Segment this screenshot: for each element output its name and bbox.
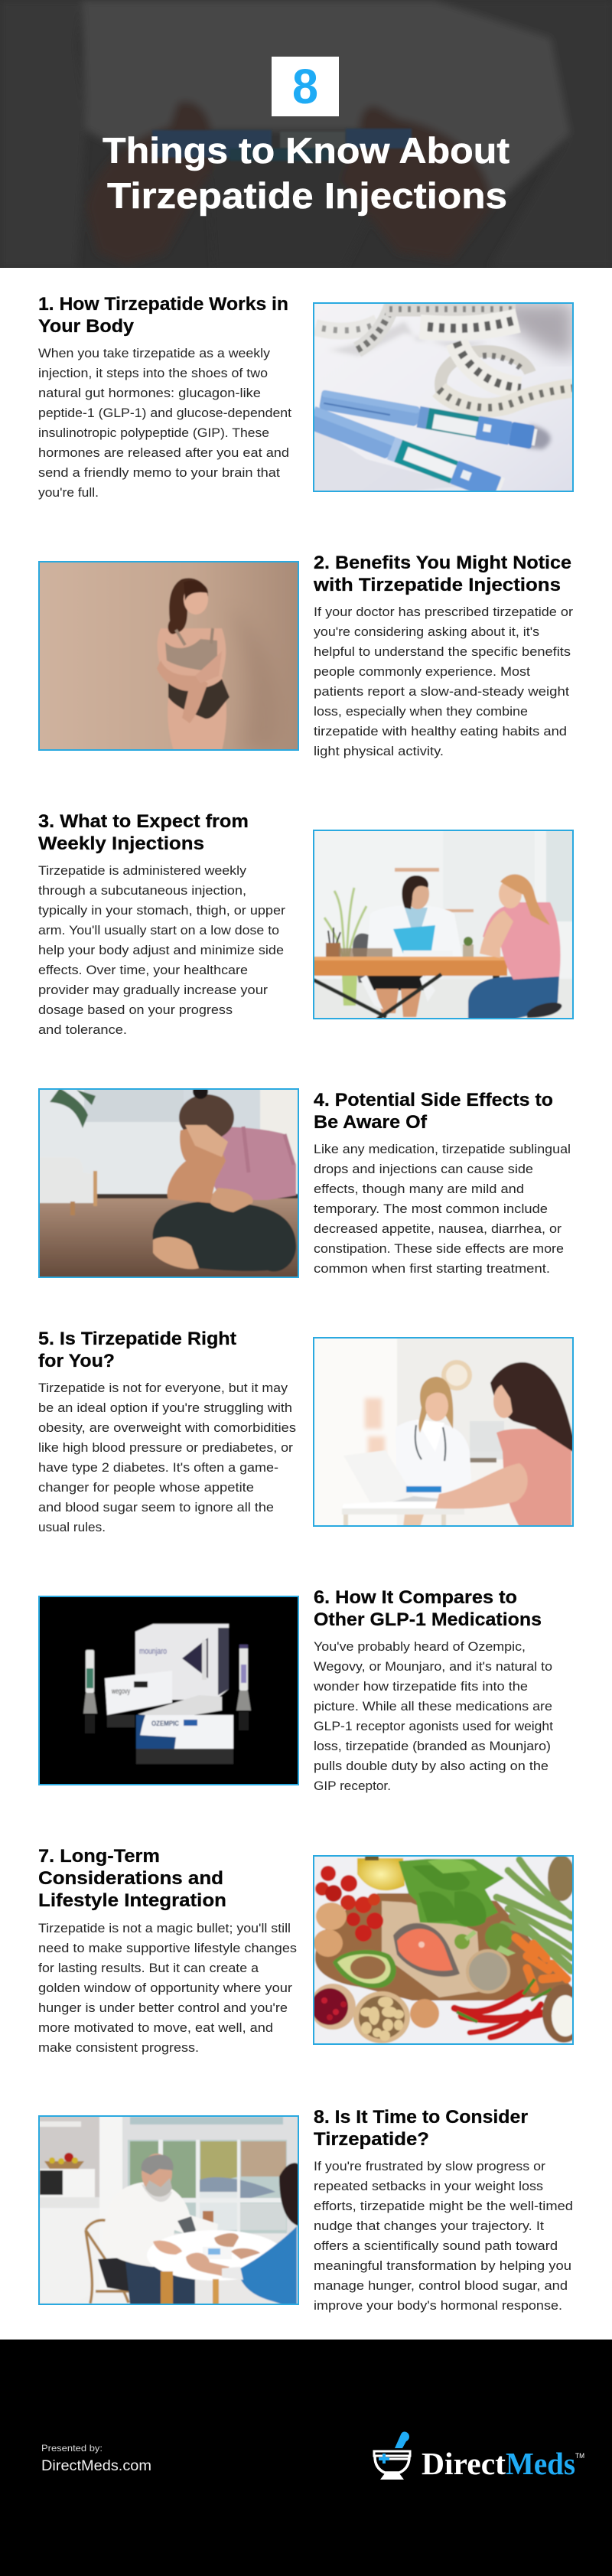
heading 5 — [38, 1329, 236, 1371]
heading 5: for You? — [38, 1351, 115, 1371]
text block 3: dosage based on your progress — [38, 1003, 233, 1017]
heading 7: 7. Long-Term — [38, 1846, 160, 1867]
text block 2: If your doctor has prescribed tirzepatide or — [314, 605, 574, 619]
heading 3 — [38, 811, 249, 854]
text block 7: Tirzepatide is not a magic bullet; you'll still — [38, 1922, 291, 1935]
panel: section 8 — [38, 2107, 573, 2313]
heading 7 — [38, 1846, 226, 1911]
image: woman with stomach discomfort on floor — [38, 1084, 299, 1278]
image: GLP-1 medication boxes — [38, 1596, 299, 1785]
text block 4: constipation. These side effects are more — [314, 1242, 564, 1256]
text block 2 — [314, 605, 574, 758]
text block 1: peptide-1 (GLP-1) and glucose-dependent — [38, 406, 291, 420]
heading 1: Your Body — [38, 316, 134, 337]
text block 6: GIP receptor. — [314, 1779, 391, 1793]
image: doctor and patient with laptop — [313, 1337, 574, 1527]
heading 1 — [38, 294, 288, 337]
text block 2: tirzepatide with healthy eating habits and — [314, 725, 567, 739]
text block 8: If you're frustrated by slow progress or — [314, 2160, 546, 2173]
text block 4: effects, though many are mild and — [314, 1182, 524, 1196]
footer — [0, 2340, 612, 2576]
title: Things to Know About — [103, 130, 509, 171]
text block 2: helpful to understand the specific benefits — [314, 645, 571, 659]
text block 1: insulinotropic polypeptide (GIP). These — [38, 426, 269, 440]
image: pens and measuring tape — [307, 302, 574, 501]
text block 2: people commonly experience. Most — [314, 665, 530, 679]
heading 6: Other GLP-1 Medications — [314, 1609, 542, 1630]
presented by — [41, 2443, 151, 2474]
text block 6: pulls double duty by also acting on the — [314, 1759, 549, 1773]
image: healthy food spread — [310, 1855, 585, 2045]
text block 3: effects. Over time, your healthcare — [38, 964, 248, 977]
image: doctor consultation at desk — [313, 830, 574, 1019]
heading 3: 3. What to Expect from — [38, 811, 249, 832]
text block 6: You've probably heard of Ozempic, — [314, 1640, 526, 1654]
text block 6: wonder how tirzepatide fits into the — [313, 1680, 528, 1694]
text block 5: like high blood pressure or prediabetes, or — [38, 1441, 294, 1455]
panel: section 6 — [38, 1587, 553, 1793]
text block 5 — [38, 1381, 296, 1534]
text block 2: light physical activity. — [314, 745, 444, 758]
heading 5: 5. Is Tirzepatide Right — [38, 1329, 236, 1349]
text block 6 — [313, 1640, 553, 1793]
wordmark — [422, 2446, 584, 2481]
text block 1: hormones are released after you eat and — [38, 446, 289, 460]
text block 4: temporary. The most common include — [314, 1202, 548, 1216]
text block 7: more motivated to move, eat well, and — [38, 2021, 273, 2035]
text block 3: help your body adjust and minimize side — [38, 944, 284, 957]
text block 2: loss, especially when they combine — [314, 705, 528, 719]
text block 6: picture. While all these medications are — [314, 1700, 552, 1714]
image: nurse checking blood pressure — [38, 2115, 299, 2305]
panel: section 5 — [38, 1329, 574, 1534]
text block 1: natural gut hormones: glucagon-like — [38, 386, 261, 400]
text block 1: When you take tirzepatide as a weekly — [38, 347, 271, 360]
text block 3: through a subcutaneous injection, — [38, 884, 246, 898]
text block 2: patients report a slow-and-steady weight — [314, 685, 570, 699]
text block 7: need to make supportive lifestyle changes — [38, 1942, 297, 1955]
text block 7: hunger is under better control and you're — [38, 2001, 288, 2015]
text block 4 — [314, 1143, 571, 1276]
text block 5: and blood sugar seem to ignore all the — [38, 1501, 274, 1515]
text block 4: drops and injections can cause side — [314, 1162, 533, 1176]
text block 3 — [38, 864, 286, 1037]
text block 5: usual rules. — [38, 1521, 106, 1534]
panel: section 7 — [38, 1846, 585, 2055]
text block 3: Tirzepatide is administered weekly — [38, 864, 247, 878]
text block 6: Wegovy, or Mounjaro, and it's natural to — [314, 1660, 552, 1674]
heading 3: Weekly Injections — [38, 833, 204, 854]
heading 4 — [314, 1090, 553, 1133]
text block 1: injection, it steps into the shoes of two — [38, 367, 268, 380]
image: woman portrait — [38, 561, 299, 751]
number badge: 8 — [292, 59, 318, 114]
text block 8: repeated setbacks in your weight loss — [314, 2180, 543, 2193]
text block 5: obesity, are overweight with comorbidities — [38, 1421, 296, 1435]
panel: section 4 — [38, 1084, 571, 1278]
text block 1: you're full. — [38, 486, 99, 500]
heading 8 — [314, 2107, 528, 2150]
text block 8: meaningful transformation by helping you — [314, 2259, 571, 2273]
heading 6: 6. How It Compares to — [314, 1587, 517, 1608]
text block 5: be an ideal option if you're struggling with — [38, 1401, 292, 1415]
text block 3: and tolerance. — [38, 1023, 127, 1037]
heading 8: Tirzepatide? — [314, 2129, 429, 2150]
image: GLP-1 medication boxes: wegovy — [111, 1687, 130, 1696]
text block 7: make consistent progress. — [38, 2041, 199, 2055]
image: GLP-1 medication boxes: mounjaro — [139, 1647, 167, 1656]
text block 8: improve your body's hormonal response. — [314, 2299, 562, 2313]
text block 2: you're considering asking about it, it's — [314, 625, 539, 639]
title: Tirzepatide Injections — [107, 175, 507, 216]
wordmark: Meds — [506, 2446, 575, 2481]
text block 4: decreased appetite, nausea, diarrhea, or — [314, 1222, 562, 1236]
text block 8: manage hunger, control blood sugar, and — [314, 2279, 568, 2293]
panel: section 2 — [38, 553, 574, 758]
text block 8: efforts, tirzepatide might be the well-timed — [314, 2199, 573, 2213]
heading 1: 1. How Tirzepatide Works in — [38, 294, 288, 315]
text block 6: GLP-1 receptor agonists used for weight — [314, 1720, 553, 1733]
text block 8: offers a scientifically sound path toward — [314, 2239, 558, 2253]
wordmark: Direct — [422, 2446, 506, 2481]
text block 3: provider may gradually increase your — [38, 983, 269, 997]
text block 8 — [314, 2160, 573, 2313]
heading 4: 4. Potential Side Effects to — [314, 1090, 553, 1110]
wordmark: TM — [575, 2452, 584, 2460]
heading 8: 8. Is It Time to Consider — [314, 2107, 528, 2128]
text block 8: nudge that changes your trajectory. It — [314, 2219, 544, 2233]
text block 1 — [38, 347, 291, 500]
heading 2: 2. Benefits You Might Notice — [314, 553, 571, 573]
text block 7: golden window of opportunity where your — [38, 1981, 293, 1995]
presented by: DirectMeds.com — [41, 2458, 151, 2474]
panel: section 3 — [38, 811, 574, 1037]
text block 5: changer for people whose appetite — [38, 1481, 254, 1495]
text block 6: loss, tirzepatide (branded as Mounjaro) — [314, 1740, 551, 1753]
text block 7: for lasting results. But it can create a — [38, 1961, 259, 1975]
heading 6 — [314, 1587, 542, 1630]
hero banner — [0, 0, 612, 268]
icon: mortar and pestle logo — [374, 2431, 410, 2480]
text block 4: Like any medication, tirzepatide sublingual — [314, 1143, 571, 1156]
text block 5: have type 2 diabetes. It's often a game- — [38, 1461, 278, 1475]
heading 2: with Tirzepatide Injections — [313, 575, 561, 595]
heading 4: Be Aware Of — [314, 1112, 428, 1133]
text block 7 — [38, 1922, 297, 2055]
heading 7: Lifestyle Integration — [38, 1890, 226, 1911]
heading 7: Considerations and — [38, 1868, 223, 1889]
number badge — [272, 57, 339, 116]
text block 5: Tirzepatide is not for everyone, but it may — [38, 1381, 288, 1395]
image: GLP-1 medication boxes: OZEMPIC — [151, 1720, 179, 1727]
heading 2 — [313, 553, 571, 595]
text block 4: common when first starting treatment. — [314, 1262, 550, 1276]
text block 3: arm. You'll usually start on a low dose to — [38, 924, 279, 937]
text block 3: typically in your stomach, thigh, or upper — [38, 904, 286, 918]
title — [103, 130, 509, 216]
text block 1: send a friendly memo to your brain that — [38, 466, 280, 480]
panel: section 1 — [38, 294, 574, 501]
presented by: Presented by: — [41, 2443, 103, 2454]
